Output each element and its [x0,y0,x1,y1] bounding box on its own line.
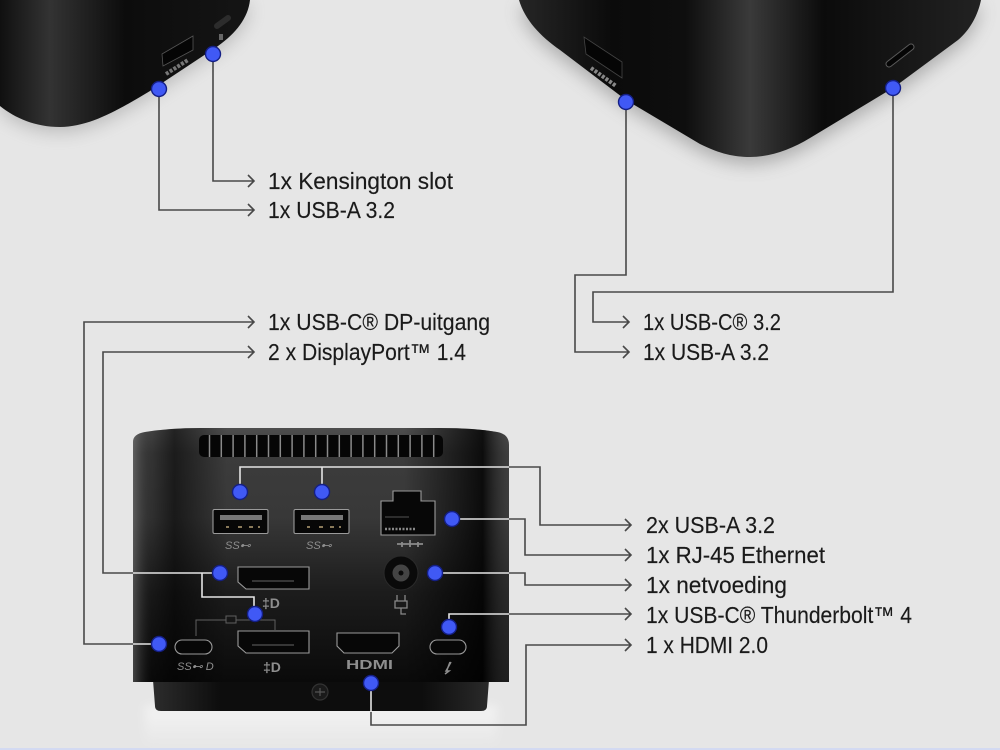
connector: RJ-45 inside [451,518,509,520]
label: DisplayPort: 2 x DisplayPort™ 1.4 [268,339,466,365]
callout lines: rear right [240,467,631,725]
label: USB-C DP output: 1x USB-C® DP-uitgang [268,309,490,335]
port: USB-A left [213,510,268,552]
connector: USB-A left [159,89,254,216]
label: Thunderbolt: 1x USB-C® Thunderbolt™ 4 [646,602,912,628]
port: HDMI: HDMI [346,657,393,672]
connector: DisplayPort inside [133,573,254,614]
connector: 2x USB-A outside [509,467,631,531]
port: DisplayPort upper [238,567,309,611]
label: USB-C top right: 1x USB-C® 3.2 [643,309,781,335]
port: power jack [384,556,418,614]
dock base [153,680,489,711]
port: USB-C DP output: SS⊷ D [177,661,214,673]
connector: USB-C right [593,88,893,328]
dock body [133,428,509,682]
callout lines: right top dock [575,88,893,358]
label: 2x USB-A: 2x USB-A 3.2 [646,512,775,538]
port: USB-A left: SS⊷ [225,540,252,552]
label: RJ-45 Ethernet: 1x RJ-45 Ethernet [646,542,826,568]
label: HDMI: 1 x HDMI 2.0 [646,632,768,658]
port: DisplayPort lower [238,631,309,675]
dock body shading [133,428,509,682]
label: USB-A top right: 1x USB-A 3.2 [643,339,769,365]
port: RJ-45 ethernet [381,491,435,547]
port: DisplayPort lower: ‡D [263,659,281,675]
port: USB-C DP output [175,640,214,673]
ventilation grille [199,435,443,457]
connector: Thunderbolt outside [509,608,631,620]
port: USB-A middle [294,510,349,552]
product: dock rear view [133,428,509,746]
screw [312,684,328,700]
connector: Thunderbolt inside [449,614,509,627]
port: HDMI [337,633,399,672]
connector: 2x USB-A inside [240,467,509,491]
label: USB-A top left: 1x USB-A 3.2 [268,197,395,223]
connector: HDMI outside [371,639,631,725]
port: USB-A middle: SS⊷ [306,540,333,552]
connector: USB-C DP output outside [84,316,254,644]
callout lines: rear left [84,316,254,644]
label: power: 1x netvoeding [646,572,787,598]
connector: power outside [509,573,631,591]
floor reflection [145,706,497,746]
port: DisplayPort upper: ‡D [262,595,280,611]
connector: Kensington slot [213,54,254,187]
product: top right dock corner [519,0,981,164]
connector: DisplayPort outside [103,346,254,573]
connector: power inside [435,572,509,574]
product: top left dock corner [0,0,250,132]
connector: USB-A right [575,102,629,358]
port: Thunderbolt USB-C [430,640,466,674]
connector: RJ-45 outside [509,519,631,561]
label: Kensington slot: 1x Kensington slot [268,168,454,194]
connector: HDMI inside [370,683,372,712]
marker dots [152,46,900,690]
DisplayPort dual monitor bracket [196,616,275,636]
bottom edge strip [0,748,1000,750]
connector: USB-C DP output inside [133,643,158,645]
callout lines: left top dock [159,54,254,216]
